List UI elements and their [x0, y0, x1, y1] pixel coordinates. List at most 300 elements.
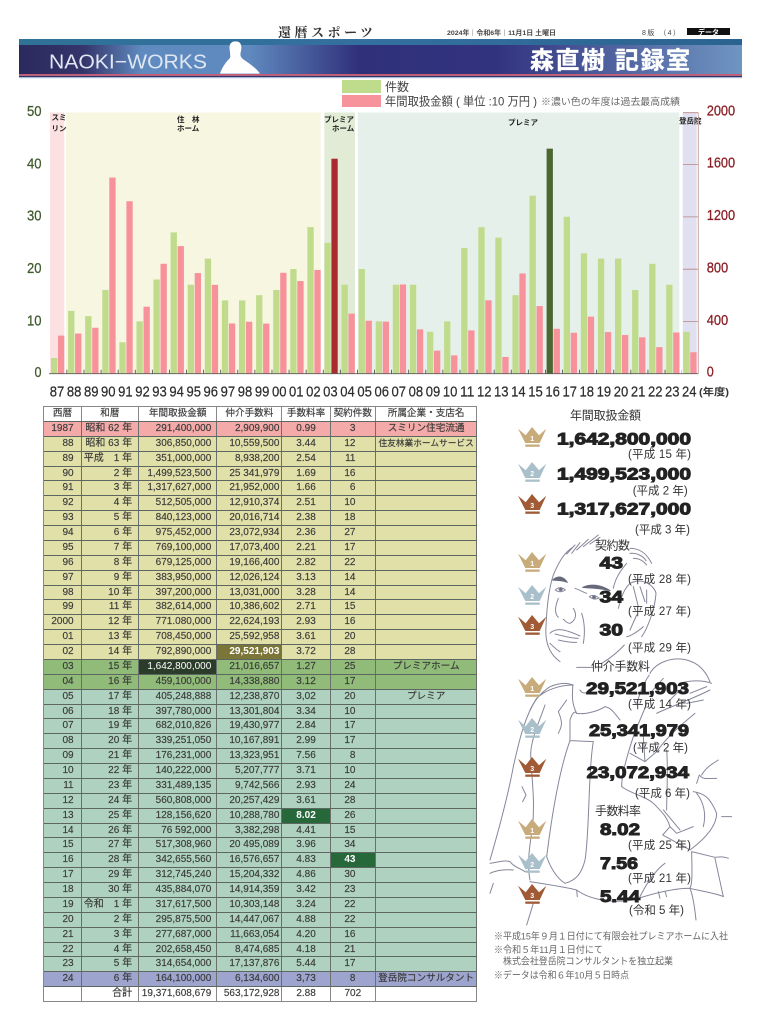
row 2022: 8,474,685 — [235, 944, 279, 954]
row 2006: 3.34 — [296, 706, 316, 716]
row 2021: 277,687,000 — [156, 929, 211, 940]
band labels: 住 林 — [177, 114, 200, 124]
band labels: リン — [52, 124, 67, 133]
row 2003: 21,016,657 — [229, 661, 279, 672]
row 2016: 342,655,560 — [156, 854, 211, 865]
row 2000: 2.93 — [296, 616, 316, 627]
row 1996: 2.82 — [296, 557, 316, 568]
total row: 2.88 — [296, 988, 316, 999]
row 2007: 19,430,977 — [229, 720, 279, 731]
year axis labels: 03 — [323, 384, 338, 400]
left axis: count: 0 — [34, 364, 42, 381]
row 1997: 383,950,000 — [156, 572, 211, 583]
row 2015: 15 — [62, 839, 74, 850]
row 2018: 23 — [344, 884, 355, 895]
period band: Sumirin — [50, 112, 64, 374]
row 1991: 1,317,627,000 — [147, 482, 211, 493]
heading: commission: 仲介手数料 — [591, 658, 650, 674]
footnotes: ※令和５年11月１日付にて — [494, 944, 603, 956]
footnotes: ※平成15年９月１日付にて有限会社プレミアホームに入社 — [494, 930, 728, 942]
issue date: 2024年｜令和6年｜11月1日 土曜日 — [447, 28, 556, 37]
row 2012: 560,808,000 — [156, 795, 211, 806]
row 2020: 4.88 — [296, 914, 316, 925]
icon: silhouette — [220, 41, 260, 74]
row 1995: 769,100,000 — [156, 542, 211, 553]
row 2002: 02 — [62, 646, 74, 657]
row 2010: 10 — [344, 765, 355, 776]
row 2006: 10 — [344, 706, 355, 716]
row 1987: 291,400,000 — [156, 423, 211, 434]
row 2003: 03 — [62, 661, 74, 672]
row 2000: 12 年 — [108, 616, 132, 627]
row 2019: 317,617,500 — [156, 899, 211, 910]
row 1988: 10,559,500 — [229, 438, 279, 449]
portrait line drawing — [490, 535, 732, 925]
row 2021: 21 — [62, 929, 74, 940]
row 2019 — [44, 898, 477, 913]
row 2005: 12,238,870 — [229, 691, 279, 702]
table header: 西暦 — [53, 408, 72, 419]
row 2014: 3,382,298 — [235, 824, 279, 836]
row 1990: 1,499,523,500 — [147, 468, 211, 478]
icon: bronze crown — [518, 884, 546, 904]
row 1994: 23,072,934 — [229, 527, 279, 538]
row 2009 — [44, 749, 477, 764]
row 1998: 14 — [344, 586, 355, 598]
icon: bronze crown: 3 — [530, 624, 534, 631]
panel: commission rate ranking — [518, 803, 691, 917]
section tag — [687, 28, 730, 36]
row 1996: 19,166,400 — [229, 557, 279, 568]
row 2018 — [44, 883, 477, 898]
row 2016: 16 — [62, 854, 74, 865]
panel: commission ranking — [518, 658, 691, 800]
row 2004: 14,338,880 — [229, 676, 279, 687]
icon: bronze crown — [518, 757, 546, 777]
year axis labels: 89 — [84, 384, 98, 400]
period band: Sumitomo Forestry Home — [66, 112, 321, 374]
row 2023 — [44, 957, 477, 972]
band labels: プレミア — [508, 118, 538, 127]
row 2005: 05 — [62, 691, 74, 702]
row 2019: 令和 1 年 — [84, 899, 132, 910]
row 2024 — [44, 972, 477, 987]
row 2022: 4.18 — [296, 944, 316, 954]
row 1994 — [44, 526, 477, 541]
panel: contract count ranking: (平成 29 年) — [628, 640, 691, 654]
left axis: count: 20 — [27, 260, 42, 277]
icon: silver crown: 2 — [530, 727, 534, 734]
year axis labels: 09 — [426, 384, 440, 400]
contract count bars — [51, 149, 690, 374]
row 2020: 22 — [344, 914, 355, 925]
icon: silver crown: 2 — [530, 471, 534, 478]
heading: contract count: 契約数 — [595, 538, 630, 552]
row 1989: 2.54 — [296, 453, 316, 464]
panel: annual amount ranking: (平成 2 年) — [633, 484, 688, 498]
panel: commission rate ranking: 8.02 — [600, 820, 640, 839]
row 1987: 昭和 62 年 — [85, 423, 132, 434]
row 1997: 97 — [62, 572, 74, 583]
panel: annual amount ranking: (平成 15 年) — [628, 447, 691, 461]
table header: 年間取扱金額 — [149, 408, 206, 419]
year axis labels: 05 — [357, 384, 372, 400]
row 2018: 14,914,359 — [229, 884, 279, 895]
icon: gold crown: 1 — [530, 828, 534, 835]
row 2003: プレミアホーム — [393, 661, 460, 672]
row 2002: 14 年 — [108, 646, 132, 657]
row 1987: スミリン住宅流通 — [388, 423, 464, 434]
row 2001: 20 — [344, 631, 355, 642]
icon: gold crown: 1 — [530, 686, 534, 693]
row 2020: 14,447,067 — [229, 914, 279, 925]
row 2014: 26 年 — [108, 824, 132, 836]
row 2017: 312,745,240 — [156, 869, 211, 880]
row 2009: 21 年 — [108, 750, 132, 761]
row 2003: 1,642,800,000 — [147, 661, 211, 672]
row 2000: 22,624,193 — [229, 616, 279, 627]
band labels — [52, 113, 702, 133]
row 1988: 306,850,000 — [156, 438, 211, 449]
row 2017: 29 年 — [108, 869, 132, 880]
chart legend — [342, 79, 680, 108]
panel: contract count ranking — [518, 538, 691, 654]
row 1996: 8 年 — [114, 557, 132, 568]
row 2001: 708,450,000 — [156, 631, 211, 642]
row 2002: 28 — [344, 646, 355, 657]
year axis labels: 97 — [221, 384, 235, 400]
chart legend: 年間取扱金額 ( 単位 :10 万円 ) — [385, 94, 537, 108]
year axis labels: 98 — [238, 384, 252, 400]
left axis: count: 10 — [27, 312, 42, 330]
year axis labels: 19 — [597, 384, 611, 400]
row 2001: 25,592,958 — [229, 631, 279, 642]
row 2017: 30 — [344, 869, 355, 880]
row 2020: 295,875,500 — [156, 914, 211, 925]
row 2007: 682,010,826 — [156, 720, 211, 731]
row 1994: 94 — [62, 527, 74, 538]
row 1995: 17 — [344, 542, 355, 553]
row 2019: 22 — [344, 899, 355, 910]
row 2023: 17 — [344, 958, 355, 969]
row 2005: 17 年 — [108, 691, 132, 702]
panel: commission ranking: (平成 6 年) — [635, 786, 690, 800]
left axis: count: 30 — [27, 208, 42, 224]
right axis: amount: 2000 — [707, 102, 735, 120]
row 2007: 2.84 — [296, 720, 316, 731]
annual amount bars — [58, 159, 697, 374]
row 2021: 4.20 — [296, 929, 316, 940]
row 1994: 2.36 — [296, 527, 316, 538]
row 1992: 10 — [344, 497, 355, 508]
row 2023: 5 年 — [114, 958, 132, 969]
row 2008: 08 — [62, 735, 74, 746]
row 2015: 517,308,960 — [156, 839, 211, 850]
year axis labels: 87 — [50, 384, 64, 400]
row 2013: 8.02 — [296, 810, 316, 821]
row 1990 — [44, 466, 477, 481]
row 2024: 6,134,600 — [235, 973, 279, 984]
row 1996: 96 — [62, 557, 74, 568]
row 2000 — [44, 615, 477, 630]
panel: contract count ranking: 43 — [600, 553, 623, 572]
year axis labels: 12 — [477, 384, 492, 400]
row 1999: 99 — [62, 601, 74, 612]
row 1995: 17,073,400 — [229, 542, 279, 553]
row 1989: 11 — [345, 453, 355, 464]
row 1993 — [44, 511, 477, 526]
row 2009: 8 — [350, 750, 355, 761]
row 1988: 3.44 — [296, 438, 316, 449]
row 2010: 22 年 — [108, 765, 132, 776]
total row: 563,172,928 — [224, 988, 279, 999]
row 2005: 20 — [344, 691, 355, 702]
row 2009: 13,323,951 — [229, 750, 279, 761]
right axis: amount — [707, 102, 735, 380]
row 2023: 17,137,876 — [229, 958, 279, 969]
row 2024: 6 年 — [114, 973, 132, 984]
row 2012: 20,257,429 — [229, 795, 279, 806]
row 2009: 7.56 — [296, 750, 316, 761]
banner title: 森直樹 記録室 — [530, 48, 690, 74]
row 2024: 24 — [62, 973, 74, 984]
panel: contract count ranking: 30 — [600, 621, 623, 640]
row 2004: 04 — [62, 676, 74, 687]
year axis labels: 96 — [204, 384, 218, 400]
table header: 所属企業・支店名 — [388, 408, 464, 419]
row 2011: 331,489,135 — [156, 780, 211, 791]
icon: gold crown — [518, 427, 546, 447]
row 1995: 95 — [62, 542, 74, 553]
year axis labels: 93 — [152, 384, 167, 400]
row 1998: 3.28 — [296, 586, 316, 598]
icon: gold crown: 1 — [530, 436, 534, 443]
row 2008: 17 — [344, 735, 355, 746]
panel: contract count ranking: 34 — [600, 587, 624, 606]
row 1990: 25 341,979 — [229, 468, 279, 478]
row 2021: 16 — [344, 929, 355, 940]
panel: annual amount ranking: 1,642,800,000 — [557, 429, 691, 448]
row 2024: 8 — [350, 973, 355, 984]
year axis labels: 94 — [169, 384, 184, 400]
row 2006: 397,780,000 — [156, 706, 211, 716]
icon: silver crown — [518, 585, 546, 605]
row 1997: 14 — [344, 572, 355, 583]
year axis labels: 95 — [186, 384, 201, 400]
row 1993: 20,016,714 — [229, 512, 279, 523]
row 2004: 17 — [344, 676, 355, 687]
row 2008 — [44, 734, 477, 749]
row 1992 — [44, 496, 477, 511]
icon: gold crown — [518, 552, 546, 572]
icon: silver crown — [518, 718, 546, 738]
year axis labels: 04 — [340, 384, 355, 400]
total row: 19,371,608,679 — [142, 988, 211, 999]
year axis labels: 99 — [255, 384, 269, 400]
row 2023: 314,654,000 — [156, 958, 211, 969]
table header: 仲介手数料 — [225, 408, 273, 419]
row 1993: 2.38 — [296, 512, 316, 523]
icon: bronze crown: 3 — [530, 893, 534, 900]
row 1999: 2.71 — [296, 601, 316, 612]
row 2014: 15 — [344, 824, 355, 836]
row 2016: 16,576,657 — [229, 854, 279, 865]
row 2007 — [44, 719, 477, 734]
row 1990: 90 — [62, 468, 74, 478]
row 2002 — [44, 645, 477, 660]
row 2017 — [44, 868, 477, 883]
row 2003: 1.27 — [296, 661, 316, 672]
newspaper name: 還暦スポーツ — [278, 25, 373, 40]
row 2001 — [44, 630, 477, 645]
panel: annual amount ranking: 1,317,627,000 — [557, 500, 691, 519]
row 1992: 92 — [62, 497, 74, 508]
row 2020: 2 年 — [114, 914, 132, 925]
row 2003: 25 — [344, 661, 355, 672]
portrait body — [490, 681, 732, 925]
row 2008: 10,167,891 — [229, 735, 279, 746]
row 1999 — [44, 600, 477, 615]
row 2000: 2000 — [51, 616, 74, 627]
row 1990: 16 — [344, 468, 355, 478]
row 2019: 19 — [62, 899, 74, 910]
row 2004: 459,100,000 — [156, 676, 211, 687]
row 2005: プレミア — [407, 691, 445, 702]
year axis labels: 15 — [528, 384, 543, 400]
band labels: スミ — [52, 113, 66, 122]
row 2022: 4 年 — [114, 944, 132, 954]
year axis labels: 22 — [648, 384, 662, 400]
row 2019: 10,303,148 — [229, 899, 279, 910]
row 1998: 98 — [62, 586, 74, 598]
chart legend: 件数 — [385, 79, 409, 94]
row 2010: 3.71 — [296, 765, 316, 776]
year axis labels: (年度) — [699, 386, 729, 398]
row 2011: 11 — [63, 780, 74, 791]
band labels: 登岳院 — [679, 116, 702, 126]
row 1993: 93 — [62, 512, 74, 523]
panel: contract count ranking: (平成 28 年) — [628, 572, 691, 586]
row 2007: 19 年 — [108, 720, 132, 731]
row 1992: 2.51 — [296, 497, 316, 508]
row 2016: 28 年 — [108, 854, 132, 865]
row 1997: 12,026,124 — [229, 572, 279, 583]
row 1993: 840,123,000 — [156, 512, 211, 523]
row 2016 — [44, 853, 477, 868]
row 1994: 975,452,000 — [156, 527, 211, 538]
row 2003 — [44, 660, 477, 675]
row 1996: 22 — [344, 557, 355, 568]
total row — [44, 987, 477, 1002]
row 1987 — [44, 422, 477, 437]
footnotes — [494, 930, 728, 982]
row 2024: 164,100,000 — [156, 973, 211, 984]
row 2004: 16 年 — [108, 676, 132, 687]
row 1997: 9 年 — [114, 572, 132, 583]
row 2013: 13 — [62, 810, 74, 821]
row 2012: 24 年 — [108, 795, 132, 806]
row 2016: 4.83 — [296, 854, 316, 865]
row 1996 — [44, 556, 477, 571]
row 2021: 11,663,054 — [230, 929, 279, 940]
row 2012: 28 — [344, 795, 355, 806]
panel: contract count ranking: (平成 27 年) — [628, 604, 691, 618]
row 1995 — [44, 541, 477, 556]
row 2007: 17 — [344, 720, 355, 731]
panel: commission rate ranking: (平成 25 年) — [628, 838, 691, 852]
row 2013: 10,288,780 — [229, 810, 279, 821]
year axis labels: 11 — [460, 384, 474, 400]
row 2015: 27 年 — [108, 839, 132, 850]
row 2020 — [44, 913, 477, 928]
row 2008: 339,251,050 — [156, 735, 211, 746]
right axis: amount: 1600 — [707, 154, 735, 172]
row 2021: 3 年 — [114, 929, 132, 940]
row 1993: 5 年 — [114, 512, 132, 523]
row 1989: 8,938,200 — [235, 453, 279, 464]
right axis: amount: 1200 — [707, 207, 735, 224]
row 1991: 91 — [62, 482, 74, 493]
portrait head — [530, 535, 710, 710]
row 2010: 5,207,777 — [235, 765, 279, 776]
row 2007: 07 — [62, 720, 74, 731]
row 2010: 140,222,000 — [156, 765, 211, 776]
row 1989 — [44, 452, 477, 466]
icon: silver crown: 2 — [530, 862, 534, 869]
section tag: データ — [698, 28, 719, 36]
row 2013: 26 — [344, 810, 355, 821]
row 2021 — [44, 928, 477, 942]
row 2011: 24 — [344, 780, 355, 791]
panel: commission rate ranking: (平成 21 年) — [628, 871, 691, 885]
icon: bronze crown: 3 — [530, 503, 534, 510]
row 2002: 29,521,903 — [229, 646, 279, 657]
row 2006: 06 — [62, 706, 74, 716]
row 2018: 18 — [62, 884, 74, 895]
bar chart — [27, 102, 735, 400]
chart legend: ※濃い色の年度は過去最高成績 — [541, 96, 680, 108]
row 2000: 771.080,000 — [156, 616, 211, 627]
footnotes: ※データは令和６年10月５日時点 — [494, 970, 629, 982]
row 2013: 128,156,620 — [156, 810, 211, 821]
year axis labels: 16 — [545, 384, 560, 400]
year axis labels: 01 — [289, 384, 304, 400]
row 2001: 01 — [62, 631, 74, 642]
edition number: 8版 （4） — [642, 28, 680, 37]
row 1988: 住友林業ホームサービス — [378, 438, 474, 448]
row 2012 — [44, 794, 477, 809]
panel: commission rate ranking: 5.44 — [600, 887, 641, 906]
row 2017: 17 — [62, 869, 74, 880]
row 1998 — [44, 586, 477, 600]
panel: commission rate ranking: 7.56 — [600, 854, 638, 873]
icon: silver crown: 2 — [530, 594, 534, 601]
row 2017: 15,204,332 — [229, 869, 279, 880]
row 2019: 3.24 — [296, 899, 316, 910]
year axis labels: 18 — [580, 384, 594, 400]
icon: gold crown: 1 — [530, 561, 534, 568]
masthead row — [278, 25, 730, 40]
year axis labels: 88 — [67, 384, 81, 400]
year axis labels: 02 — [306, 384, 321, 400]
table header — [44, 407, 477, 422]
row 1992: 512,505,000 — [156, 497, 211, 508]
row 2011 — [44, 779, 477, 794]
row 2008: 2.99 — [296, 735, 316, 746]
row 1997: 3.13 — [296, 572, 316, 583]
panel: commission ranking: 23,072,934 — [587, 763, 690, 782]
row 2011: 9,742,566 — [235, 780, 279, 791]
